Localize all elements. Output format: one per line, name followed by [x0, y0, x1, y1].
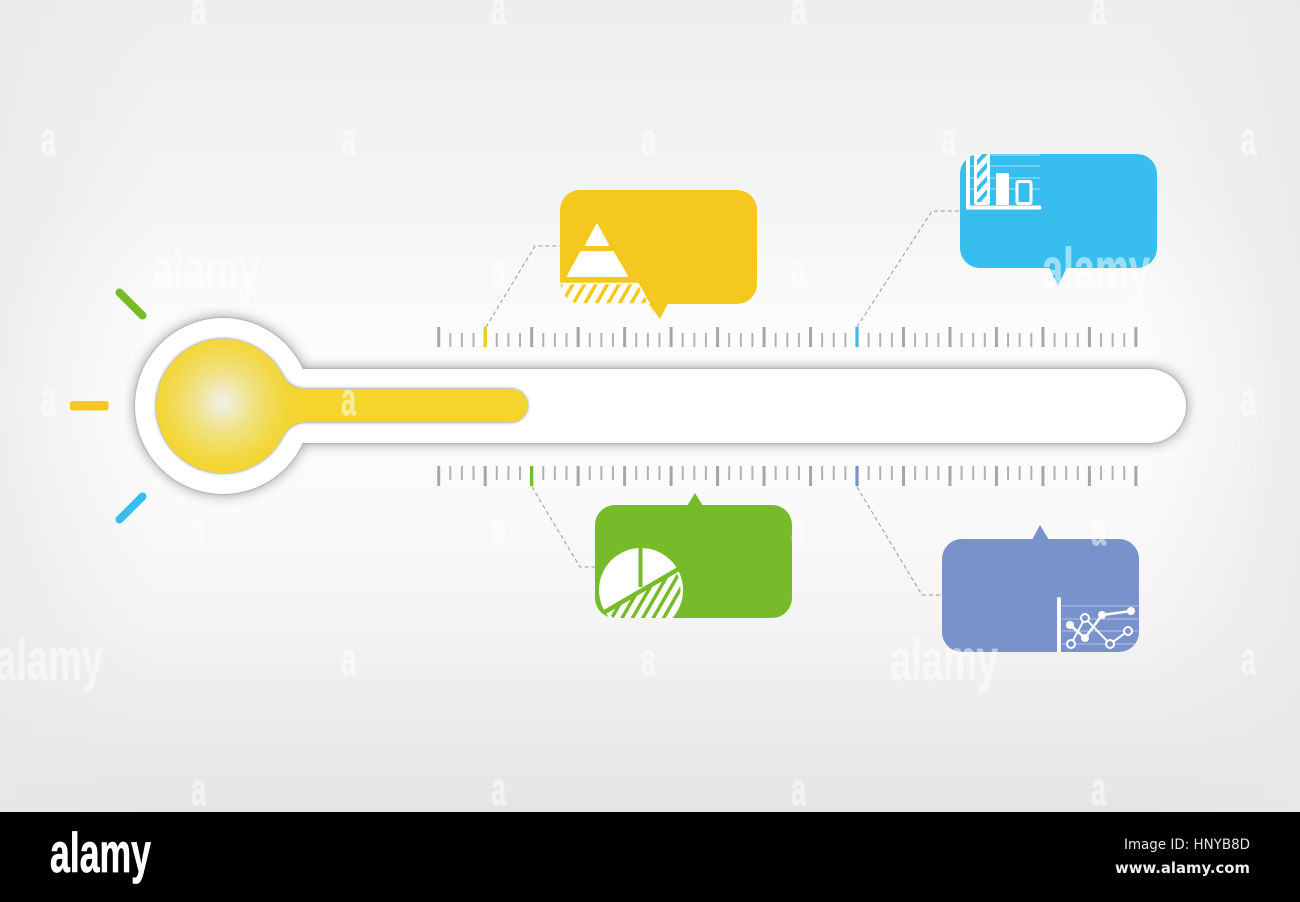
- callout: blue bar chart: [960, 150, 1157, 286]
- watermark: small repeated marks: a: [1241, 633, 1256, 685]
- icon: line chart: [1059, 599, 1138, 656]
- callout: green pie chart: [595, 493, 792, 618]
- thermometer yellow fill: [156, 339, 528, 473]
- dashed connector: periwinkle: [857, 487, 942, 595]
- watermark: small repeated marks: a: [491, 503, 506, 555]
- callout: periwinkle line chart: [942, 525, 1139, 656]
- watermark: small repeated marks: a: [641, 633, 656, 685]
- watermark: small repeated marks: a: [791, 503, 806, 555]
- dashed connector: green: [532, 487, 595, 567]
- thermometer tube: [135, 318, 1186, 494]
- watermark: small repeated marks: a: [1091, 503, 1106, 555]
- bottom tick scale: [437, 466, 1137, 486]
- footer bar: [0, 812, 1300, 902]
- watermark: small repeated marks: a: [1241, 113, 1256, 165]
- watermark: small repeated marks: a: [191, 503, 206, 555]
- watermark: small repeated marks: a: [1091, 763, 1106, 815]
- footer image id: Image ID: HNYB8D: [1124, 837, 1250, 853]
- watermark: large marks: alamy: [1042, 237, 1150, 302]
- watermark: small repeated marks: a: [941, 113, 956, 165]
- watermark: small repeated marks: a: [341, 113, 356, 165]
- watermark: small repeated marks: a: [191, 763, 206, 815]
- watermark: small repeated marks: a: [491, 243, 506, 295]
- watermark: small repeated marks: a: [341, 633, 356, 685]
- watermark: small repeated marks: a: [41, 373, 56, 425]
- watermark: large marks: alamy: [890, 628, 998, 693]
- watermark: small repeated marks: a: [641, 113, 656, 165]
- watermark: small repeated marks: a: [491, 763, 506, 815]
- watermark: small repeated marks: a: [791, 243, 806, 295]
- ray: blue: [120, 496, 142, 520]
- watermark: small repeated marks: a: [41, 113, 56, 165]
- callout: yellow pyramid: [558, 190, 757, 319]
- footer url: www.alamy.com: [1115, 859, 1250, 877]
- dashed connector: yellow: [486, 246, 560, 327]
- top tick scale: [437, 327, 1137, 347]
- watermark: small repeated marks: a: [1241, 373, 1256, 425]
- watermark: large marks: [0, 237, 1150, 693]
- icon: bar chart: [968, 150, 1040, 208]
- watermark: large marks: alamy: [152, 238, 260, 303]
- ray: green: [120, 292, 142, 316]
- icon: pyramid chart: [558, 225, 650, 305]
- footer logo: alamy: [50, 821, 151, 884]
- watermark: small repeated marks: a: [791, 763, 806, 815]
- dashed connector: blue: [857, 211, 960, 327]
- ray: yellow: [70, 401, 108, 410]
- icon: pie chart: [599, 548, 683, 618]
- watermark: small repeated marks: a: [341, 373, 356, 425]
